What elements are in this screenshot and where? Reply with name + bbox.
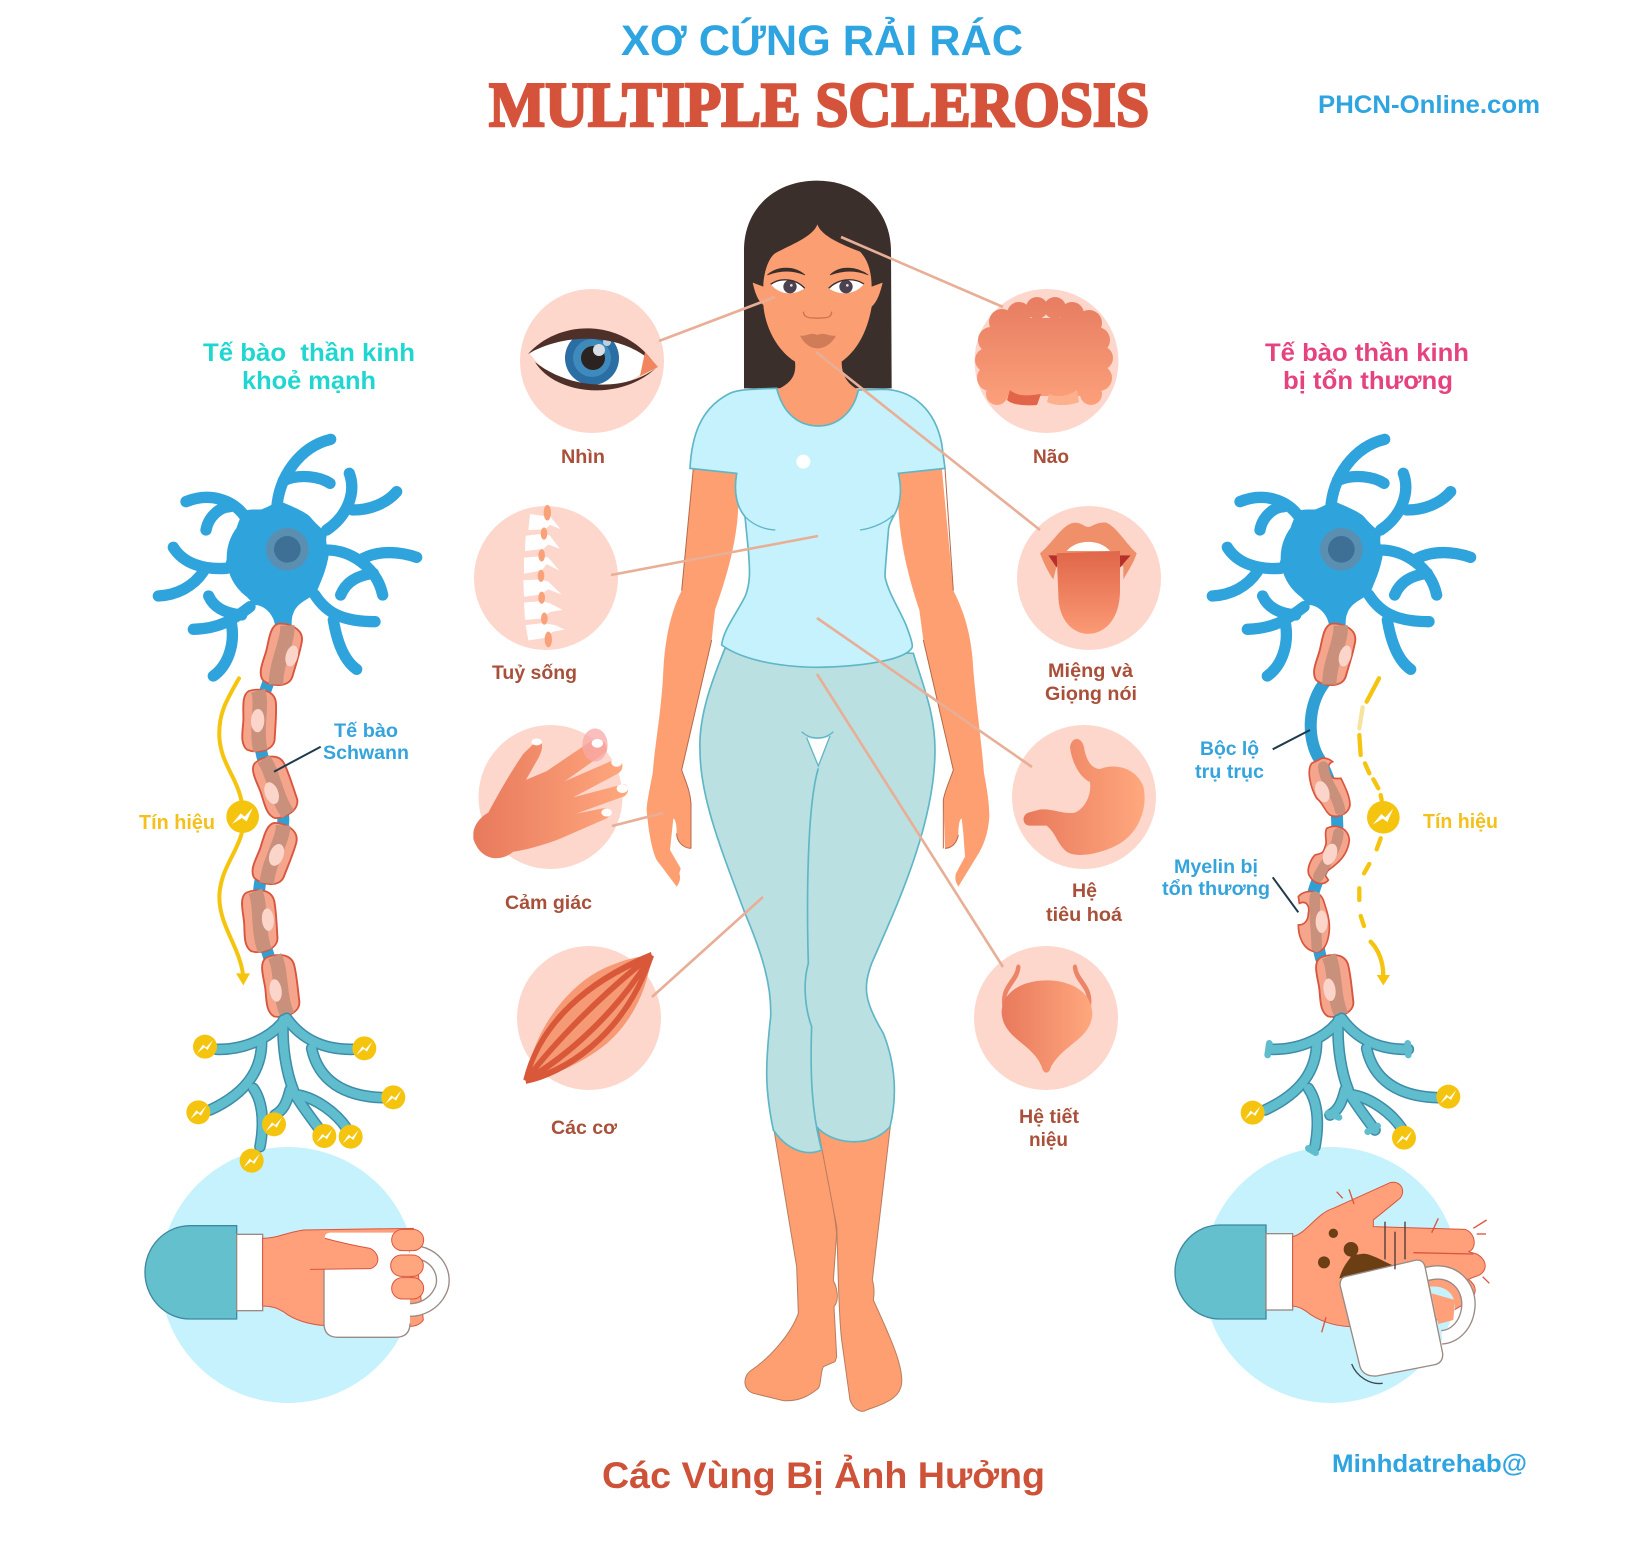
damaged axon with injured myelin [1298,621,1359,1019]
icon: stomach [1024,739,1145,855]
label: urinary system: niệu [1029,1130,1068,1151]
label: mouth and speech [1045,661,1137,705]
label: digestive system: tiêu hoá [1046,905,1122,926]
author label: Minhdatrehab@ [1332,1450,1527,1478]
arm left [647,467,738,887]
t-shirt [690,388,945,667]
panel: vision circle [520,289,664,433]
label: damaged myelin with pointer: Myelin bị [1174,856,1258,878]
title: Vietnamese: XƠ CỨNG RẢI RÁC [621,16,1023,65]
label: Schwann cell with pointer: Schwann [323,742,409,764]
panel: mouth circle [1017,506,1161,650]
heading: healthy nerve cell: khoẻ mạnh [242,367,376,395]
label: damaged myelin with pointer: tổn thương [1162,878,1270,900]
left lower leg [745,1130,837,1401]
icon: brain [975,297,1113,405]
hair [744,181,892,388]
illustration: trembling hand dropping a mug [1175,1182,1489,1384]
label: vision: Nhìn [561,447,605,468]
signal arrow: healthy [219,678,259,985]
label: damaged myelin with pointer [1162,856,1298,912]
panel: sensation circle [473,725,628,869]
label: digestive system: Hệ [1072,881,1097,902]
icon: hand [473,728,628,858]
label: urinary system: Hệ tiết [1019,1107,1080,1128]
nose [803,312,832,318]
label: urinary system [1019,1107,1080,1151]
label: exposed axon with pointer: trụ trục [1195,761,1264,783]
panel: damaged neuron cell body [1212,439,1471,676]
illustration: hand holding a mug steadily [145,1226,443,1337]
label: spinal cord: Tuỷ sống [492,663,577,684]
caption: affected areas: Các Vùng Bị Ảnh Hưởng [602,1455,1045,1496]
panel: spinal cord circle [474,505,618,650]
eyes [771,280,805,293]
heading: healthy nerve cell [203,339,415,395]
label: brain: Não [1033,447,1069,468]
panel: brain circle [974,289,1118,433]
signal arrow: damaged, dashed [1359,678,1400,985]
right lower leg [818,1123,902,1411]
icon: mouth and tongue [1040,522,1137,634]
website label: PHCN-Online.com [1318,91,1540,119]
circle: damaged hand background [1203,1147,1459,1403]
label: signal left: Tín hiệu [139,812,215,834]
label: signal right: Tín hiệu [1423,811,1498,833]
lips [800,334,836,348]
icon: spine [523,505,565,647]
label: exposed axon with pointer: Bộc lộ [1200,738,1259,760]
heading: damaged nerve cell [1265,339,1469,395]
panel: muscles circle [517,946,661,1090]
label: Schwann cell with pointer: Tế bào [334,720,398,742]
icon: iris [565,331,619,385]
label: Schwann cell with pointer [274,720,409,772]
heading: damaged nerve cell: Tế bào thần kinh [1265,339,1469,367]
face and neck [753,224,883,390]
panel: digestive circle [1012,725,1156,869]
icon: muscle [526,955,652,1081]
axon terminals: healthy [186,1018,405,1173]
axon terminals: damaged [1241,1018,1460,1153]
label: mouth and speech: Giọng nói [1045,684,1137,705]
illustration: woman figure [647,181,989,1411]
title: English: MULTIPLE SCLEROSIS [489,70,1149,140]
arm right [898,467,989,887]
healthy axon with Schwann cells [241,621,306,1019]
panel: urinary circle [974,946,1118,1090]
icon: bladder [1002,967,1092,1072]
heading: healthy nerve cell: Tế bào thần kinh [203,339,415,367]
panel: healthy neuron cell body [158,439,417,676]
pointer lines from body to organs [611,237,1040,997]
label: muscles: Các cơ [551,1118,617,1139]
heading: damaged nerve cell: bị tổn thương [1283,367,1453,395]
label: digestive system [1046,881,1122,926]
circle: healthy hand background [160,1147,416,1403]
label: exposed axon with pointer [1195,730,1310,783]
label: mouth and speech: Miệng và [1048,661,1133,682]
leggings [700,648,935,1152]
label: sensation: Cảm giác [505,893,592,914]
